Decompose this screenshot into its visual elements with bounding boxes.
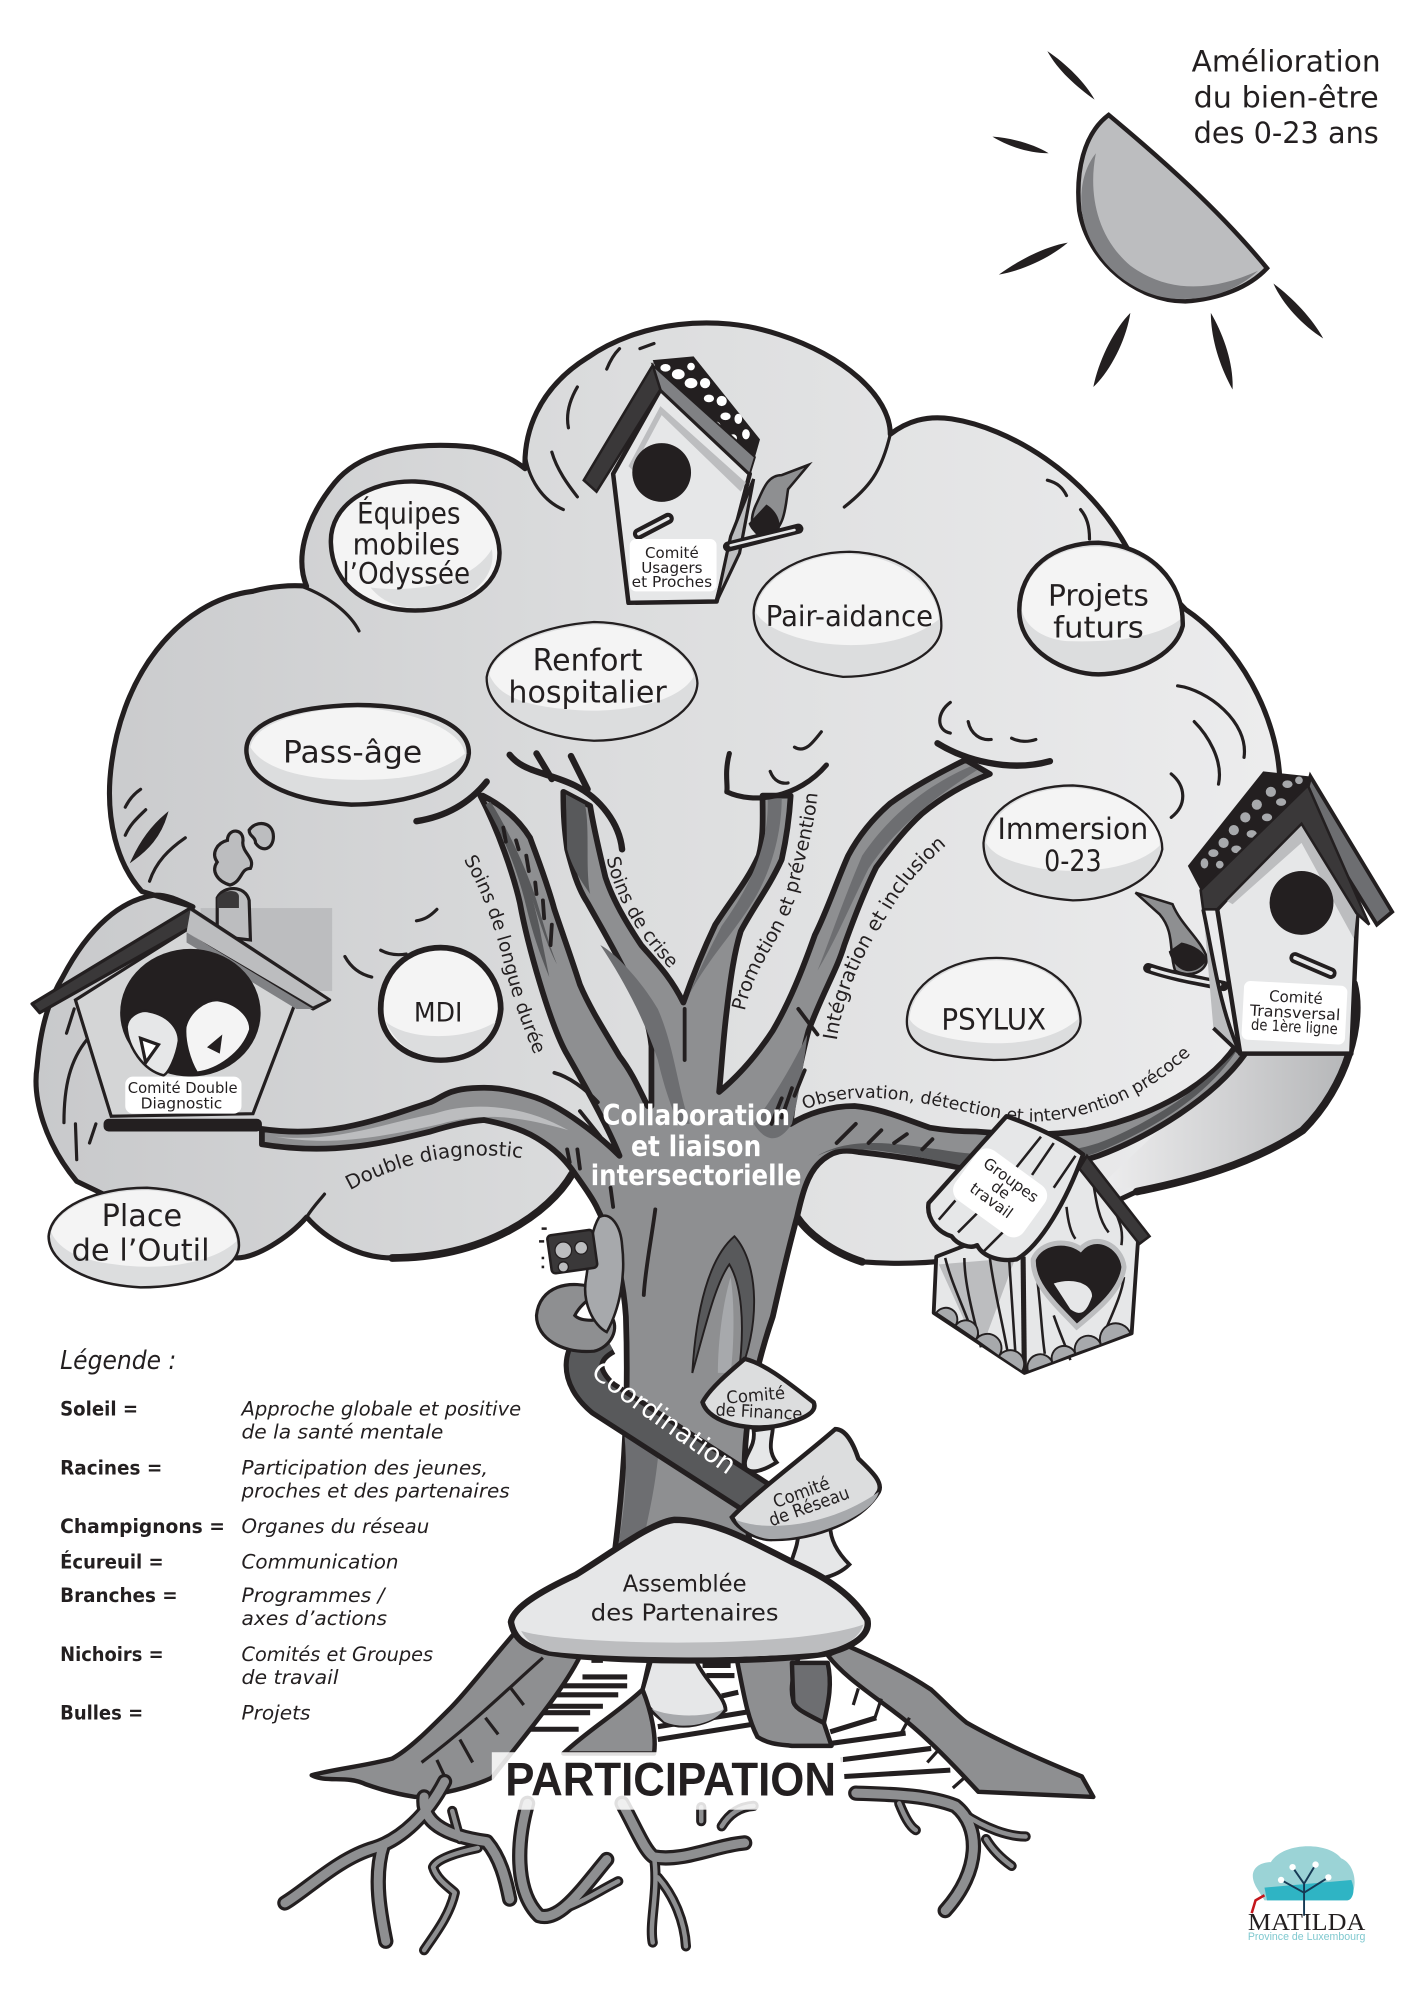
label: groupes de travail: Groupes (980, 1154, 1042, 1206)
label: comite usagers (630, 539, 717, 591)
chimney (217, 889, 250, 940)
bubble: renfort hospitalier: hospitalier (508, 675, 667, 710)
roof (32, 908, 330, 1013)
bubble: mdi: MDI (414, 998, 462, 1029)
legend: soleil: Soleil = (60, 1398, 138, 1421)
nest box: bottom heart (928, 1116, 1150, 1373)
legend: racines: Racines = (60, 1456, 162, 1479)
bubble: psylux: PSYLUX (941, 1002, 1046, 1036)
label: comite transversal: Transversal (1248, 1001, 1341, 1024)
legend: champignons: Organes du réseau (241, 1515, 429, 1538)
bubble: immersion 0-23: 0-23 (1044, 844, 1102, 878)
mushroom: assemblee des partenaires: des Partenaires (591, 1601, 779, 1627)
sun half disc (1078, 115, 1267, 301)
sun caption (1192, 45, 1381, 150)
wooden roof (928, 1116, 1083, 1260)
tree: branches and trunk (262, 760, 1245, 1564)
legend: ecureuil: Communication (241, 1550, 399, 1573)
label: soins de crise: Soins de crise (607, 856, 676, 968)
nest box: left (32, 824, 332, 1132)
central label: collaboration: Collaboration (602, 1099, 790, 1132)
bubble: pass-age: Pass-âge (283, 735, 422, 770)
coordination band: Coordination (594, 1363, 733, 1474)
legend title: Légende : (60, 1346, 176, 1376)
label: comite double diagnostic: Comité Double (128, 1079, 238, 1097)
nest box: top (584, 356, 809, 603)
mushroom: comite de reseau (732, 1429, 880, 1539)
legend: branches: axes d’actions (241, 1607, 387, 1630)
legend: nichoirs: Nichoirs = (60, 1643, 164, 1666)
bubble: pair-aidance: Pair-aidance (766, 600, 933, 633)
platform (104, 1119, 262, 1132)
bubble: pair-aidance (754, 552, 941, 677)
logo matilda: MATILDA (1248, 1909, 1366, 1936)
mushroom: comite de finance: Comité (726, 1384, 786, 1409)
coordination band (564, 1344, 769, 1509)
root flares (312, 1628, 1093, 1797)
mushroom: comite de reseau: Comité (770, 1473, 833, 1513)
bubble: equipes mobiles: l’Odyssée (342, 557, 470, 591)
label: double diagnostic: Double diagnostic (345, 1142, 522, 1190)
legend: bulles: Projets (241, 1702, 310, 1725)
legend: soleil: Approche globale et positive (239, 1398, 521, 1421)
bubble: equipes mobiles: Équipes (357, 496, 461, 531)
mushroom: comite de finance: de Finance (715, 1400, 803, 1425)
bubble: place de l'outil (49, 1188, 239, 1287)
label: groupes de travail (948, 1143, 1052, 1242)
legend: ecureuil: Écureuil = (60, 1550, 164, 1573)
mushroom: assemblee des partenaires (511, 1520, 868, 1660)
sun caption: Amélioration (1192, 45, 1381, 79)
bubble: renfort hospitalier (487, 622, 697, 741)
label: comite double diagnostic: Diagnostic (141, 1095, 222, 1113)
bubble: equipes mobiles: mobiles (353, 527, 460, 561)
trunk knot (692, 1236, 754, 1377)
legend: soleil: de la santé mentale (241, 1421, 443, 1444)
two chicks (127, 1011, 179, 1075)
central label: collaboration: intersectorielle (591, 1159, 802, 1192)
sun caption: des 0-23 ans (1194, 116, 1379, 150)
bubble: equipes mobiles (331, 481, 499, 610)
squirrel (537, 1216, 623, 1351)
legend: racines (60, 1456, 510, 1502)
piano keys (511, 1655, 984, 1796)
label: comite double diagnostic (125, 1077, 241, 1114)
legend: branches (60, 1584, 387, 1630)
mushroom stems (745, 1428, 849, 1580)
curved branch labels (345, 794, 1190, 1190)
branch ticks and spikes (503, 828, 932, 1295)
branch shading (485, 802, 549, 977)
bubble: pass-age (246, 705, 469, 805)
branch forks (416, 743, 1050, 849)
legend: ecureuil (60, 1550, 399, 1573)
central label: collaboration (591, 1099, 802, 1192)
small mushroom under assembly (643, 1655, 726, 1726)
label: groupes de travail: de (987, 1177, 1014, 1203)
label: comite usagers: Comité (645, 544, 699, 562)
nest box: right (1135, 771, 1392, 1054)
legend: soleil (60, 1398, 521, 1444)
grey patch behind roof (201, 908, 332, 991)
bubble: projets futurs (1019, 543, 1183, 674)
bubble: place de l'outil: Place (102, 1199, 182, 1234)
bubble: mdi (381, 948, 501, 1060)
label: soins de longue duree: Soins de longue durée (464, 855, 543, 1054)
canopy fold lines (64, 344, 1244, 1217)
label: comite transversal: de 1ère ligne (1251, 1016, 1338, 1038)
mushroom: assemblee des partenaires: Assemblée (623, 1571, 747, 1597)
mushroom: comite de finance (703, 1359, 814, 1427)
sun caption: du bien-être (1194, 80, 1379, 114)
smoke (215, 831, 252, 885)
sun rays (992, 51, 1323, 390)
bubble: psylux (907, 958, 1081, 1060)
legend: branches: Programmes / (241, 1584, 387, 1607)
legend: racines: proches et des partenaires (240, 1479, 510, 1502)
legend: branches: Branches = (60, 1584, 178, 1607)
canopy (36, 323, 1357, 1263)
bubble: renfort hospitalier: Renfort (533, 643, 643, 678)
legend: champignons: Champignons = (60, 1515, 225, 1538)
label: comite usagers: Usagers (641, 559, 703, 577)
legend: nichoirs (60, 1643, 433, 1689)
participation banner: PARTICIPATION (505, 1754, 836, 1807)
label: comite transversal: Comité (1269, 987, 1323, 1008)
label: comite usagers: et Proches (632, 573, 712, 591)
label: integration et inclusion: Intégration et inclusion (822, 839, 946, 1039)
mushroom: comite de reseau: de Réseau (766, 1483, 852, 1531)
label: promotion et prevention: Promotion et prévention (732, 794, 818, 1010)
logo matilda (1248, 1846, 1366, 1943)
label: groupes de travail: travail (966, 1179, 1016, 1222)
lower roots (285, 1782, 1026, 1950)
bubble: projets futurs: futurs (1053, 610, 1144, 644)
label: comite transversal (1241, 981, 1348, 1045)
logo matilda: Province de Luxembourg (1248, 1931, 1365, 1943)
legend: nichoirs: de travail (241, 1666, 339, 1689)
legend: nichoirs: Comités et Groupes (241, 1643, 433, 1666)
sun (992, 51, 1323, 390)
legend: champignons (60, 1515, 429, 1538)
legend: bulles (60, 1702, 310, 1725)
bubble: place de l'outil: de l’Outil (72, 1234, 210, 1269)
central label: collaboration: et liaison (631, 1130, 761, 1163)
bubble: immersion 0-23 (984, 785, 1162, 900)
legend (60, 1346, 521, 1725)
bubble: projets futurs: Projets (1048, 578, 1149, 612)
bubble: immersion 0-23: Immersion (998, 812, 1148, 846)
legend: bulles: Bulles = (60, 1702, 143, 1725)
label: observation detection: Observation, détection et intervention précoce (802, 1049, 1190, 1122)
legend: racines: Participation des jeunes, (241, 1456, 488, 1479)
